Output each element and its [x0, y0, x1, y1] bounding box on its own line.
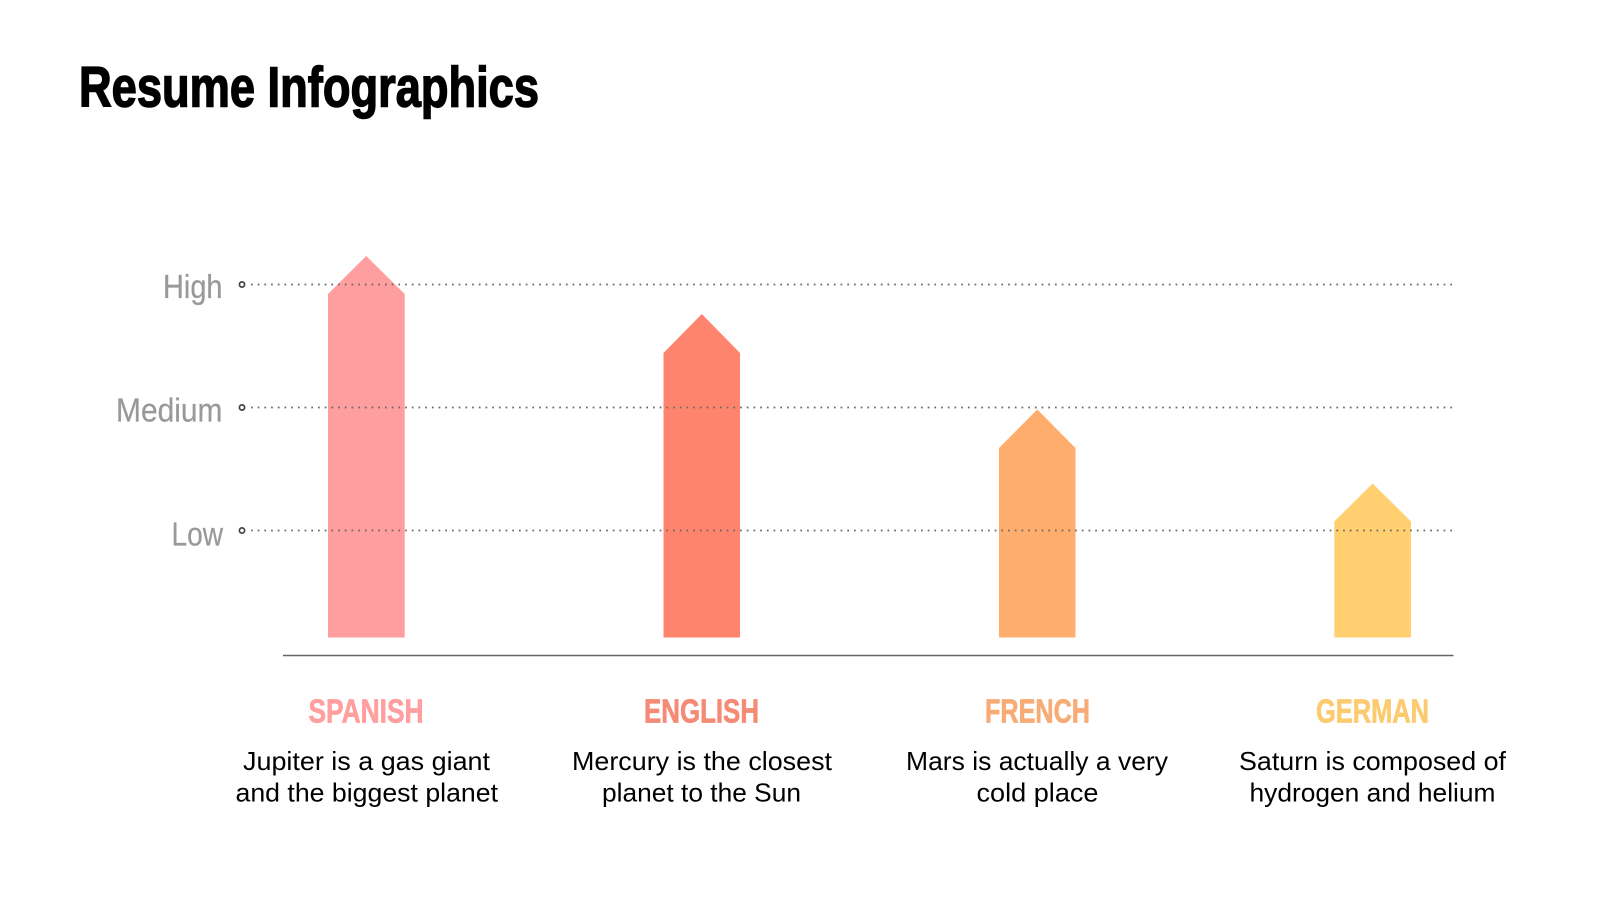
column text: Spanish [236, 694, 499, 808]
axis label: High: High [163, 268, 222, 305]
axis label: Medium: Medium [116, 392, 222, 428]
description: Spanish: and the biggest planet [236, 778, 499, 808]
description: French: Mars is actually a very [906, 746, 1168, 776]
title: Resume Infographics [79, 56, 539, 120]
axis baseline [283, 654, 1454, 656]
label: French: FRENCH [985, 694, 1090, 730]
bar: Spanish [328, 256, 405, 638]
description: English: Mercury is the closest [572, 746, 833, 776]
column text: English [572, 694, 833, 808]
bar: German [1334, 484, 1411, 638]
label: Spanish: SPANISH [308, 694, 424, 730]
gridline: Medium [239, 405, 1454, 410]
bar: English [664, 314, 740, 638]
description: German: Saturn is composed of [1239, 746, 1507, 776]
description: French: cold place [976, 778, 1098, 808]
label: German: GERMAN [1316, 694, 1429, 730]
axis label: Low: Low [172, 516, 223, 552]
gridline: Low [239, 528, 1454, 533]
gridline: High [239, 282, 1454, 287]
label: English: ENGLISH [644, 694, 759, 730]
bar: French [999, 410, 1076, 638]
description: Spanish: Jupiter is a gas giant [243, 746, 491, 776]
description: English: planet to the Sun [602, 778, 801, 808]
description: German: hydrogen and helium [1250, 778, 1496, 808]
bar chart [116, 256, 1454, 656]
column text: French [906, 694, 1168, 808]
column text: German [1239, 694, 1507, 808]
